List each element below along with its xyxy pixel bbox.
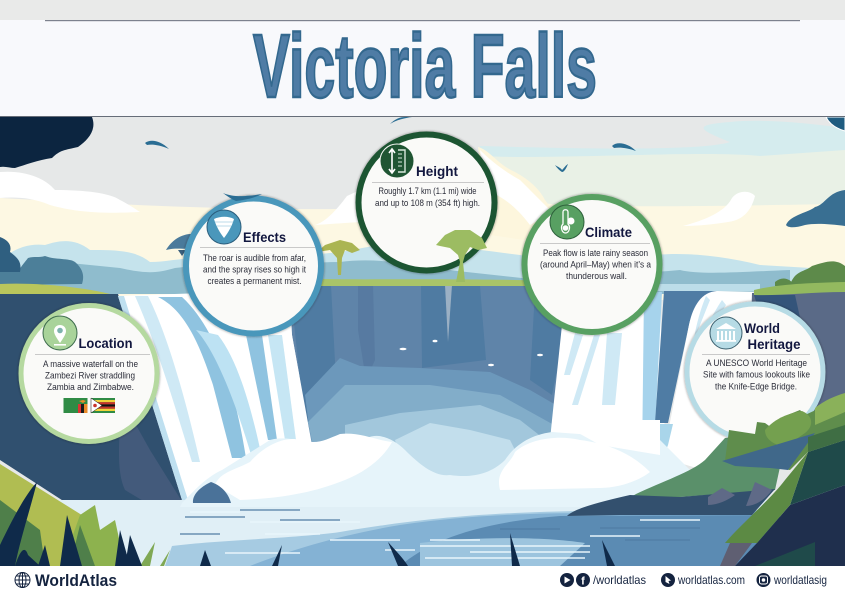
- heading: world heritage: Heritage: [748, 337, 801, 352]
- icon: thermometer: [550, 205, 584, 239]
- left cliff grey tip: [123, 500, 188, 528]
- dark cloud top right: [826, 117, 845, 131]
- panel: height: [358, 134, 494, 270]
- pale band behind far falls: [658, 284, 760, 291]
- title: Victoria Falls: [253, 17, 597, 117]
- tree-line left: [0, 256, 83, 285]
- footer: [0, 566, 845, 594]
- icon: flag of Zimbabwe: [91, 398, 115, 413]
- text: climate: [540, 248, 652, 281]
- grass left: [0, 284, 110, 294]
- far-right waterfall: [660, 291, 754, 468]
- white clouds: [0, 147, 755, 226]
- panel: location: [21, 306, 157, 442]
- text: location: A massive waterfall on the: [43, 359, 138, 369]
- mist foam: [185, 420, 690, 500]
- text: effects: The roar is audible from afar,: [203, 253, 306, 263]
- grass strip centre: [321, 279, 525, 286]
- panel: effects: [186, 198, 321, 334]
- text: effects: creates a permanent mist.: [208, 276, 302, 286]
- text: climate: (around April–May) when it’s a: [540, 260, 652, 270]
- acacia tree centre: [436, 230, 487, 282]
- text: world heritage: [703, 358, 810, 392]
- instagram handle: worldatlasig: [773, 573, 827, 587]
- water: [58, 500, 780, 566]
- icon: cursor: [661, 573, 675, 587]
- rock in water: [193, 482, 231, 503]
- text: height: and up to 108 m (354 ft) high.: [375, 198, 480, 208]
- left foreground grass: [0, 464, 170, 566]
- right green bank: [567, 438, 780, 516]
- icon: flag of Zambia: [64, 398, 88, 413]
- blue tree: [166, 234, 191, 256]
- left cliff shading: [119, 426, 181, 500]
- blue cloud right: [786, 190, 845, 227]
- centre cliff face: [292, 286, 558, 404]
- icon: instagram: [756, 573, 770, 587]
- icon: tornado: [207, 210, 241, 244]
- panel: climate: [524, 197, 660, 332]
- icon: video: [560, 573, 574, 587]
- text: effects: [203, 253, 306, 286]
- brand: WorldAtlas: [35, 571, 117, 590]
- heading: climate: Climate: [585, 225, 632, 240]
- heading: world heritage: [744, 321, 801, 352]
- text: world heritage: the Knife-Edge Bridge.: [715, 382, 797, 392]
- blue rock column: [655, 291, 717, 423]
- icon: ruler: [380, 144, 414, 178]
- birds: [145, 117, 636, 172]
- illustrated waterfall scene: [0, 117, 845, 566]
- text: climate: Peak flow is late rainy season: [543, 248, 648, 258]
- acacia tree left: [322, 240, 360, 275]
- right cliff: [752, 292, 845, 411]
- icon: facebook: f: [581, 576, 585, 588]
- website: worldatlas.com: [677, 573, 745, 587]
- text: height: [375, 186, 480, 208]
- heading: location: Location: [78, 336, 132, 351]
- heading: world heritage: World: [744, 321, 780, 336]
- icon: map pin: [43, 316, 77, 350]
- text: location: Zambezi River straddling: [45, 370, 135, 380]
- panel: world heritage: [687, 304, 823, 440]
- sky: [0, 117, 845, 500]
- left waterfall: [118, 290, 312, 500]
- header band: [0, 0, 845, 117]
- text: climate: thunderous wall.: [566, 271, 627, 281]
- text: location: Zambia and Zimbabwe.: [47, 382, 134, 392]
- text: height: Roughly 1.7 km (1.1 mi) wide: [378, 186, 476, 196]
- text: world heritage: Site with famous lookouts like: [703, 370, 810, 380]
- icon: facebook: [576, 573, 590, 588]
- icon: globe: [15, 572, 30, 588]
- right foreground cliff: [720, 440, 845, 566]
- dark tree left edge: [0, 237, 21, 272]
- icon: museum: [710, 317, 742, 349]
- dark cloud top left: [0, 117, 93, 168]
- dark reeds: [0, 482, 615, 566]
- text: location: [43, 359, 138, 392]
- right grass and bushes: [754, 261, 845, 295]
- text: effects: and the spray rises so high it: [203, 264, 306, 274]
- bird over effects ring: [223, 193, 262, 201]
- heading: effects: Effects: [243, 230, 286, 245]
- right-centre waterfall: [550, 292, 664, 434]
- distant hills: [0, 241, 845, 294]
- heading: height: Height: [416, 164, 459, 179]
- social handle: /worldatlas: [593, 573, 646, 587]
- centre cliff stripes and mist: [294, 286, 562, 476]
- left cliff: [0, 294, 182, 500]
- text: world heritage: A UNESCO World Heritage: [706, 358, 807, 368]
- bushes over heritage panel: [722, 393, 845, 470]
